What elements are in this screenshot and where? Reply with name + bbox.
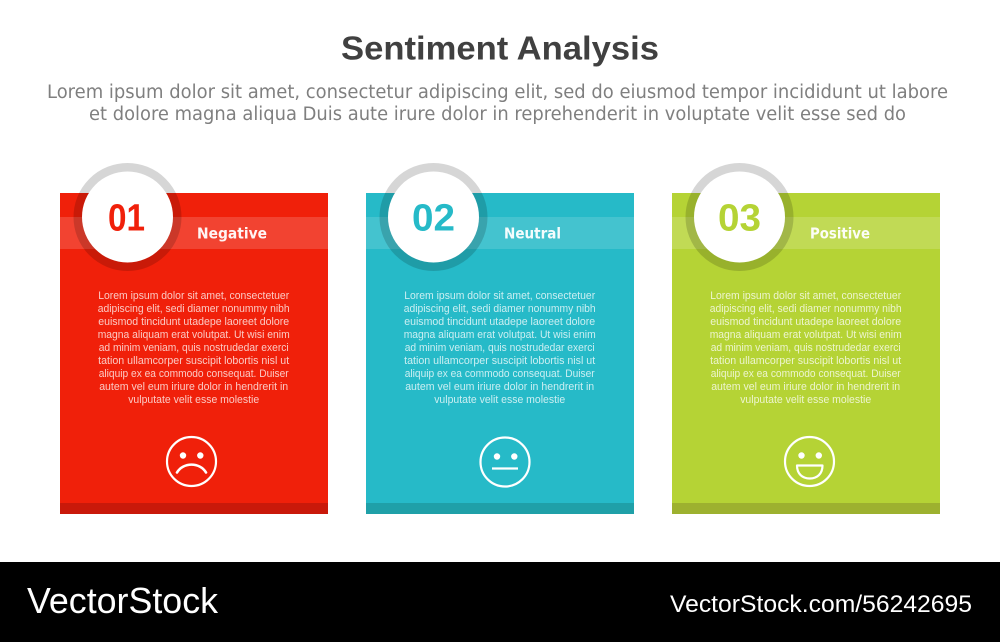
body text: negative: euismod tincidunt utadepe laoreet dolore	[98, 316, 289, 328]
body text: positive: tation ullamcorper suscipit lobortis nisl ut	[710, 355, 901, 367]
icon: neutral face	[480, 438, 530, 486]
body text: positive: aliquip ex ea commodo consequat. Duiser	[711, 368, 901, 380]
number 03: 03	[718, 198, 761, 240]
ring: negative	[78, 168, 177, 266]
card background: neutral	[366, 193, 634, 514]
bottom strip: negative	[60, 503, 328, 514]
footer image id: VectorStock.com/56242695	[670, 591, 972, 618]
body text: neutral: autem vel eum iriure dolor in hendrerit in	[405, 381, 594, 393]
body text: negative: tation ullamcorper suscipit lobortis nisl ut	[98, 355, 289, 367]
body text: negative: aliquip ex ea commodo consequat. Duiser	[99, 368, 289, 380]
number circle: neutral	[388, 172, 479, 262]
body text: neutral: ad minim veniam, quis nostrudedar exerci	[405, 342, 595, 354]
ring: positive	[690, 168, 789, 266]
body text: neutral: adipiscing elit, sedi diamer nonummy nibh	[404, 303, 596, 315]
body text: positive: magna aliquam erat volutpat. Ut wisi enim	[710, 329, 902, 341]
card background: positive	[672, 193, 940, 514]
bottom strip: neutral	[366, 503, 634, 514]
body text: positive: euismod tincidunt utadepe laoreet dolore	[710, 316, 901, 328]
subtitle text: Lorem ipsum dolor sit amet, consectetur adipiscing elit, sed do eiusmod tempor incididunt ut labore	[47, 82, 948, 103]
body text: negative	[98, 290, 290, 406]
body text: neutral: Lorem ipsum dolor sit amet, consectetuer	[404, 290, 596, 302]
subtitle text: et dolore magna aliqua Duis aute irure dolor in reprehenderit in voluptate velit esse sed do	[89, 104, 906, 125]
body text: negative: autem vel eum iriure dolor in hendrerit in	[99, 381, 288, 393]
body text: positive: ad minim veniam, quis nostrudedar exerci	[711, 342, 901, 354]
panel: neutral	[366, 168, 634, 514]
subtitle text	[47, 82, 948, 125]
panel: negative	[60, 168, 328, 514]
heading band: neutral	[366, 217, 634, 249]
heading: positive: Positive	[810, 224, 870, 242]
footer logo text: VectorStock	[27, 580, 219, 621]
footer bar	[0, 562, 1000, 642]
heading: neutral: Neutral	[504, 224, 561, 242]
body text: positive: vulputate velit esse molestie	[740, 394, 871, 406]
number 01: 01	[108, 198, 145, 240]
card background: negative	[60, 193, 328, 514]
body text: neutral: tation ullamcorper suscipit lobortis nisl ut	[404, 355, 595, 367]
body text: neutral: euismod tincidunt utadepe laoreet dolore	[404, 316, 595, 328]
icon: happy face	[785, 437, 834, 486]
body text: positive: Lorem ipsum dolor sit amet, consectetuer	[710, 290, 902, 302]
number circle: negative	[82, 172, 173, 262]
body text: positive	[710, 290, 902, 406]
body text: neutral	[404, 290, 596, 406]
body text: neutral: vulputate velit esse molestie	[434, 394, 565, 406]
body text: negative: ad minim veniam, quis nostrudedar exerci	[99, 342, 289, 354]
heading band: positive	[672, 217, 940, 249]
body text: neutral: magna aliquam erat volutpat. Ut wisi enim	[404, 329, 596, 341]
body text: negative: vulputate velit esse molestie	[128, 394, 259, 406]
panel: positive	[672, 168, 940, 514]
ring: neutral	[384, 168, 483, 266]
body text: negative: Lorem ipsum dolor sit amet, consectetuer	[98, 290, 290, 302]
icon: sad face	[167, 437, 216, 486]
body text: positive: adipiscing elit, sedi diamer nonummy nibh	[710, 303, 902, 315]
title: Sentiment Analysis	[341, 30, 659, 66]
body text: positive: autem vel eum iriure dolor in hendrerit in	[711, 381, 900, 393]
body text: negative: adipiscing elit, sedi diamer nonummy nibh	[98, 303, 290, 315]
body text: neutral: aliquip ex ea commodo consequat. Duiser	[405, 368, 595, 380]
number circle: positive	[694, 172, 785, 262]
heading: negative: Negative	[197, 224, 267, 242]
heading band: negative	[60, 217, 328, 249]
body text: negative: magna aliquam erat volutpat. Ut wisi enim	[98, 329, 290, 341]
number 02: 02	[412, 198, 455, 240]
bottom strip: positive	[672, 503, 940, 514]
